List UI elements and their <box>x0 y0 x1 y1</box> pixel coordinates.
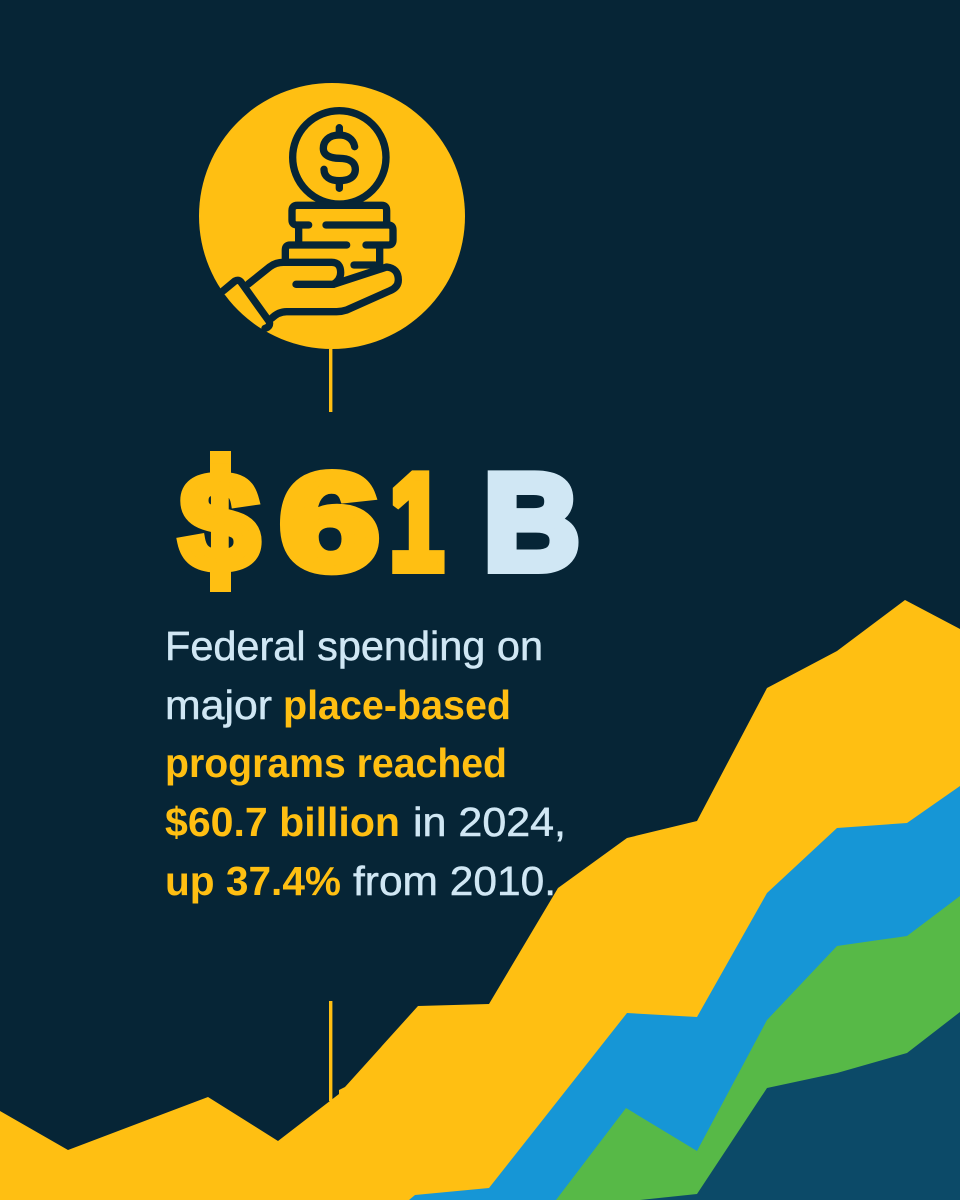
big number: $61B: 6 <box>280 446 379 598</box>
big number: $61B: 1 <box>390 446 444 598</box>
description text: up 37.4% <box>165 858 341 904</box>
stacked area chart <box>0 600 960 1200</box>
description text: from 2010. <box>353 858 556 904</box>
big number: $61B <box>180 446 580 598</box>
description text: in 2024, <box>413 799 566 845</box>
big number: $61B: $ <box>180 446 258 598</box>
connector line: bottom <box>329 1001 332 1101</box>
area: yellow <box>0 600 960 1200</box>
big number: $61B: B <box>484 446 580 598</box>
description text <box>165 623 566 904</box>
area: green <box>556 896 960 1200</box>
area: dark teal <box>640 1012 960 1200</box>
connector line: top <box>329 349 332 412</box>
description text: Federal spending on <box>165 623 543 669</box>
description text: programs reached <box>165 740 507 786</box>
description text: place-based <box>283 682 511 728</box>
description text: major <box>165 682 272 728</box>
area: blue <box>409 786 960 1200</box>
description text: $60.7 billion <box>165 799 400 845</box>
icon: hand holding coins <box>199 83 465 349</box>
